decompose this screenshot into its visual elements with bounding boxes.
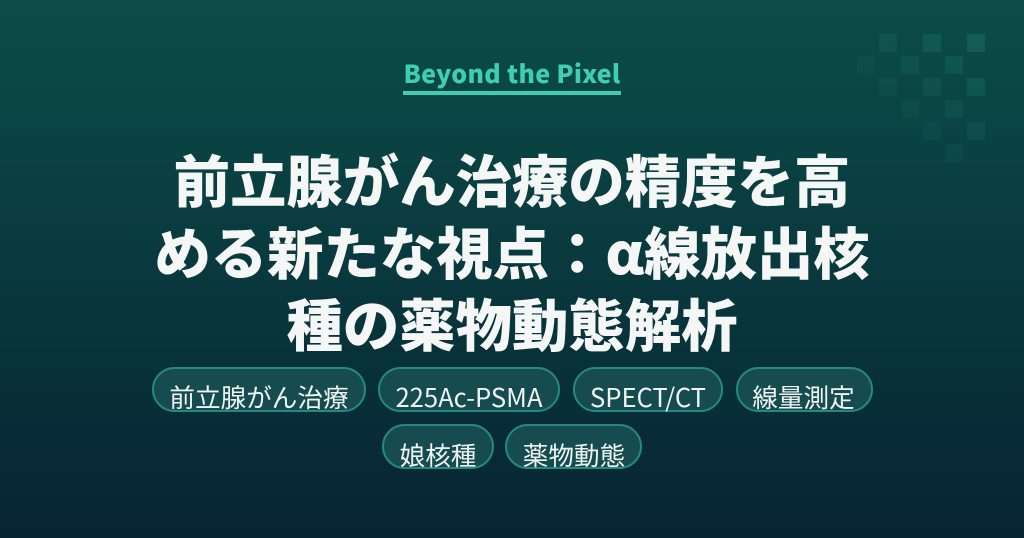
- tag: SPECT/CT: SPECT/CT: [590, 378, 706, 415]
- title: 種の薬物動態解析: [286, 282, 738, 363]
- tag: 娘核種: 娘核種: [400, 436, 476, 473]
- tag: 225Ac-PSMA: 225Ac-PSMA: [395, 378, 543, 415]
- tag: 前立腺がん治療: [152, 367, 366, 412]
- tag: 前立腺がん治療: 前立腺がん治療: [169, 378, 349, 415]
- tag: 娘核種: [382, 424, 494, 469]
- brand label: Beyond the Pixel: [404, 55, 620, 91]
- brand underline: [403, 91, 621, 95]
- title: [154, 138, 870, 363]
- tag: SPECT/CT: [573, 367, 723, 412]
- tag: 線量測定: [736, 367, 873, 412]
- title: める新たな視点：α線放出核: [154, 210, 870, 291]
- tag: 225Ac-PSMA: [378, 367, 560, 412]
- title: 前立腺がん治療の精度を高: [174, 138, 850, 219]
- tag: 線量測定: 線量測定: [752, 378, 855, 415]
- decorative pixel grid: [879, 34, 985, 140]
- tag: 薬物動態: [505, 424, 642, 469]
- tag: 薬物動態: 薬物動態: [523, 436, 625, 473]
